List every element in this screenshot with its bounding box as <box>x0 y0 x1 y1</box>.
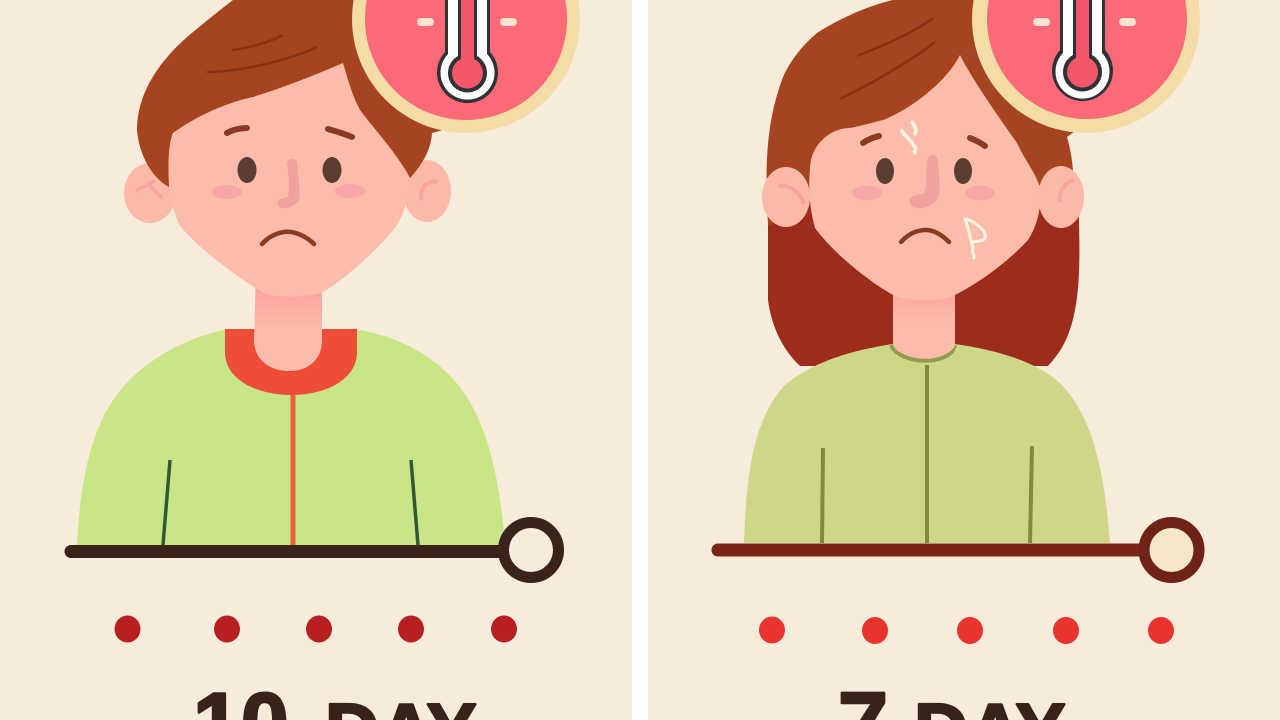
illustration: girl neck <box>893 270 955 358</box>
icon: girl right ear <box>1038 166 1084 228</box>
panel: 7 day girl <box>648 0 1280 720</box>
illustration: girl face <box>809 55 1040 300</box>
illustration: girl cheeks <box>852 186 995 200</box>
illustration: girl sweater <box>744 344 1110 543</box>
illustration: girl lower hair <box>768 190 1079 366</box>
illustration: girl brows <box>863 136 985 146</box>
illustration: boy cheeks <box>212 184 365 199</box>
illustration: girl mouth <box>901 230 949 242</box>
timeline: right <box>718 522 1199 578</box>
illustration: girl hair strands <box>840 18 935 99</box>
illustration: boy hair <box>137 0 480 187</box>
illustration: girl forehead sweat <box>902 122 916 153</box>
icon: boy right ear <box>403 160 451 222</box>
label: 7 day <box>838 675 1065 720</box>
illustration: boy neck <box>254 270 322 371</box>
illustration: boy brows <box>227 128 352 137</box>
icon: girl left ear <box>762 167 810 227</box>
icon: boy left ear <box>124 163 176 223</box>
label: 10 day <box>193 676 476 720</box>
timeline: left <box>71 522 558 578</box>
illustration: boy face <box>168 55 410 296</box>
icon: thermometer badge right <box>972 0 1200 133</box>
illustration: boy sweater <box>77 329 505 545</box>
illustration: girl upper hair <box>767 0 1090 225</box>
dots: left <box>114 616 517 642</box>
illustration: boy nose <box>277 159 300 208</box>
illustration: boy mouth <box>262 232 314 244</box>
illustration: boy eyes <box>238 157 342 183</box>
dots: right <box>759 616 1174 644</box>
icon: thermometer badge left <box>352 0 580 133</box>
illustration: girl eyes <box>876 158 972 184</box>
illustration: girl nose <box>909 155 940 208</box>
illustration: girl cheek sweat <box>965 219 985 258</box>
panel: 10 day boy <box>0 0 632 720</box>
